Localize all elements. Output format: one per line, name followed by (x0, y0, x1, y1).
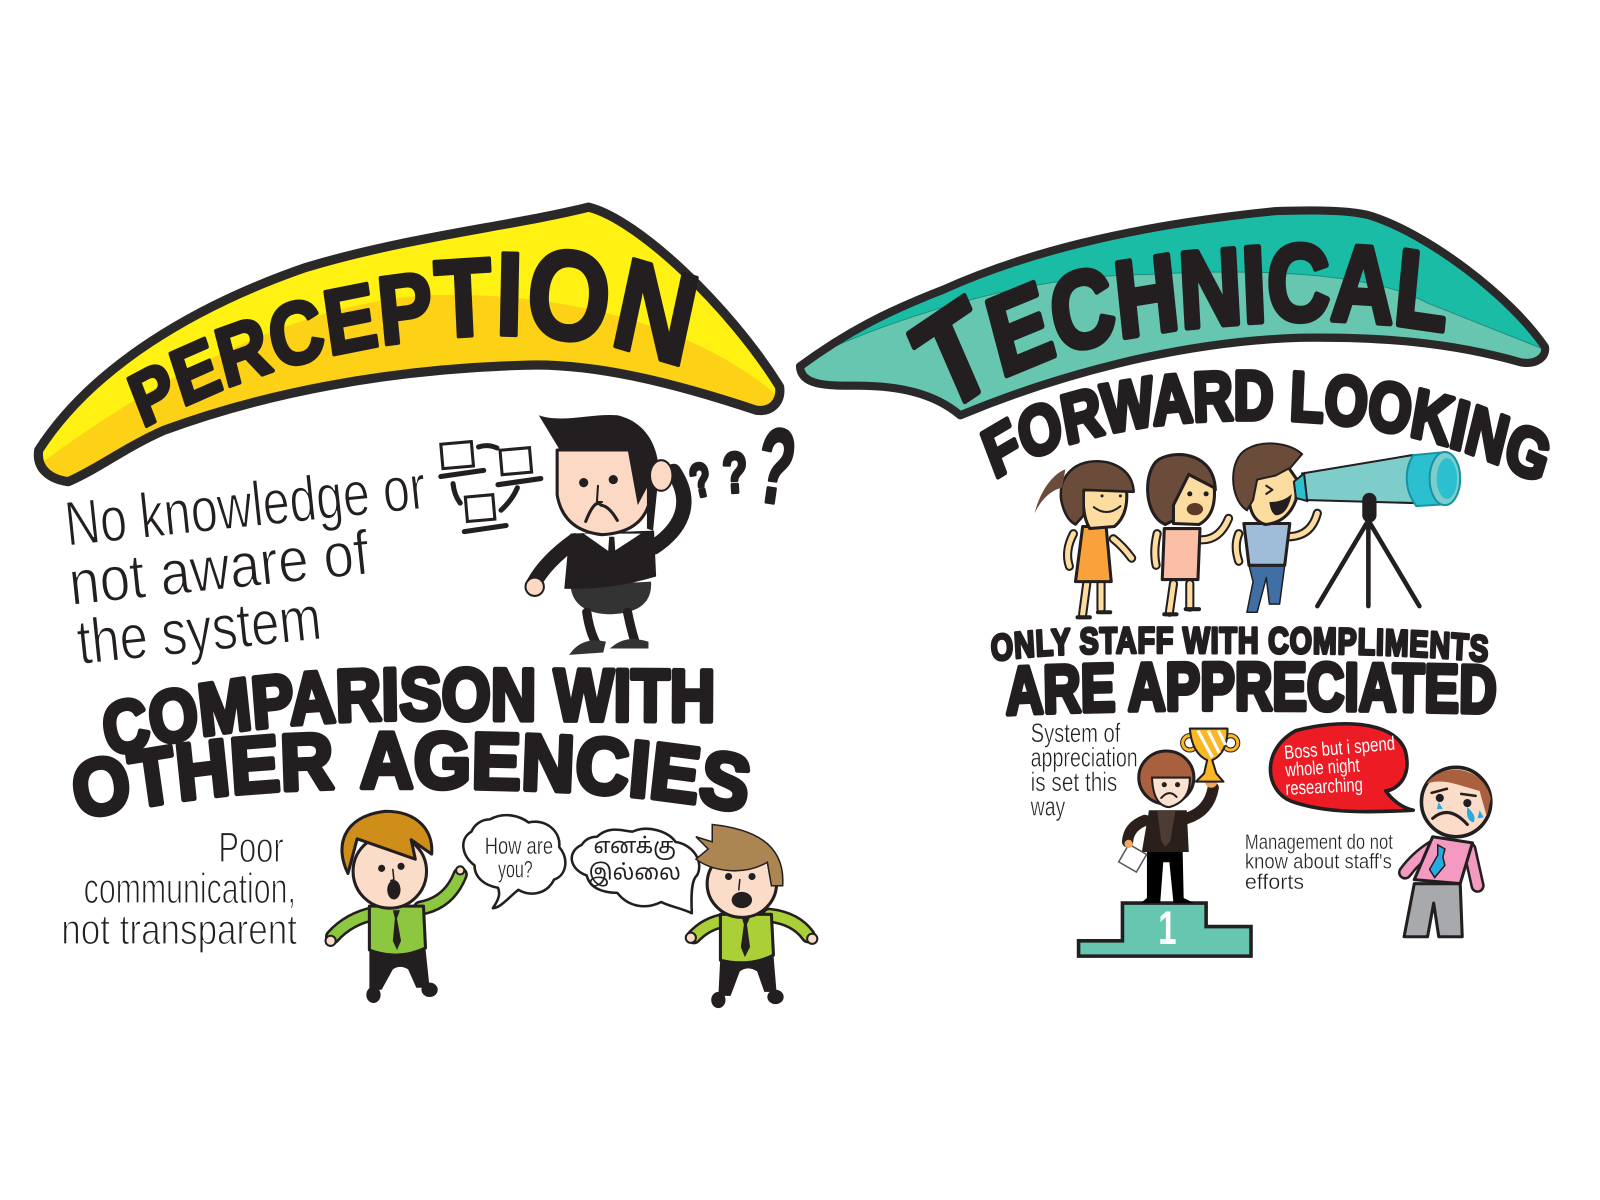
heading: are appreciated: ARE APPRECIATED (1006, 660, 1496, 717)
text: tamil (589, 834, 681, 887)
text: boss but i spend: Boss but i spend (1283, 733, 1396, 764)
icon: question marks: ? (721, 440, 749, 505)
text: management do not know: efforts (1245, 870, 1304, 894)
text: boss but i spend: whole night (1284, 754, 1361, 782)
speech bubble: tamil reply (572, 829, 699, 913)
text: poor communication: Poor (218, 824, 284, 872)
text: rank one: 1 (1158, 901, 1176, 954)
icon: trophy (1183, 729, 1238, 782)
text: management do not know: know about staff's (1245, 849, 1392, 873)
text: tamil: இல்லை (589, 861, 681, 887)
icon: telescope (1294, 452, 1460, 606)
text: how are you (485, 833, 553, 884)
character: winner with trophy (1119, 729, 1238, 903)
heading: comparison with: COMPARISON WITH (102, 666, 714, 755)
text: boss but i spend: researching (1285, 774, 1363, 800)
heading: perception: PERCEPTION (126, 248, 699, 428)
text: management do not know (1245, 830, 1393, 894)
speech bubble: how are you (463, 815, 565, 908)
banner: technical (796, 206, 1550, 420)
character: girl in pink dress (1148, 455, 1229, 614)
text: system of appreciation: way (1030, 791, 1066, 821)
text: poor communication (61, 824, 297, 954)
icon: question marks: ? (750, 406, 802, 528)
text: no knowledge (61, 452, 429, 678)
text: system of appreciation: System of (1031, 718, 1121, 748)
heading: technical: TECHNICAL (906, 242, 1446, 404)
text: poor communication: communication, (84, 865, 296, 913)
text: management do not know: Management do not (1245, 830, 1393, 854)
speech bubble: boss but i spend (1270, 724, 1413, 812)
text: boss but i spend (1283, 733, 1396, 800)
text: tamil: எனக்கு (594, 834, 676, 860)
character: confused manager (526, 415, 684, 653)
character: man with brown hair (686, 824, 817, 1008)
text: system of appreciation: is set this (1031, 767, 1117, 797)
icon: question marks (685, 406, 802, 528)
text: system of appreciation (1030, 718, 1138, 821)
text: no knowledge: not aware of (66, 518, 373, 619)
character: man with orange hair (326, 811, 464, 1003)
infographic canvas (34, 202, 1550, 1008)
character: girl in orange dress (1035, 461, 1134, 617)
text: no knowledge: No knowledge or (61, 452, 429, 560)
heading: other agencies: OTHER AGENCIES (72, 730, 750, 818)
text: no knowledge: the system (74, 583, 325, 678)
icon: podium (1079, 901, 1251, 956)
text: how are you: How are (485, 833, 553, 860)
text: how are you: you? (498, 857, 533, 884)
panel: technical (796, 206, 1550, 958)
character: crying employee (1404, 767, 1491, 937)
icon: networked laptops (441, 442, 541, 532)
icon: question marks: ? (685, 452, 716, 508)
heading: only staff with compliments: ONLY STAFF WITH COMPLIMENTS (990, 626, 1488, 663)
text: system of appreciation: appreciation (1031, 742, 1138, 772)
text: poor communication: not transparent (61, 906, 297, 954)
banner: perception (34, 202, 784, 486)
heading: forward looking: FORWARD LOOKING (980, 369, 1550, 480)
character: boy at telescope (1233, 443, 1317, 612)
panel: perception (34, 202, 818, 1008)
